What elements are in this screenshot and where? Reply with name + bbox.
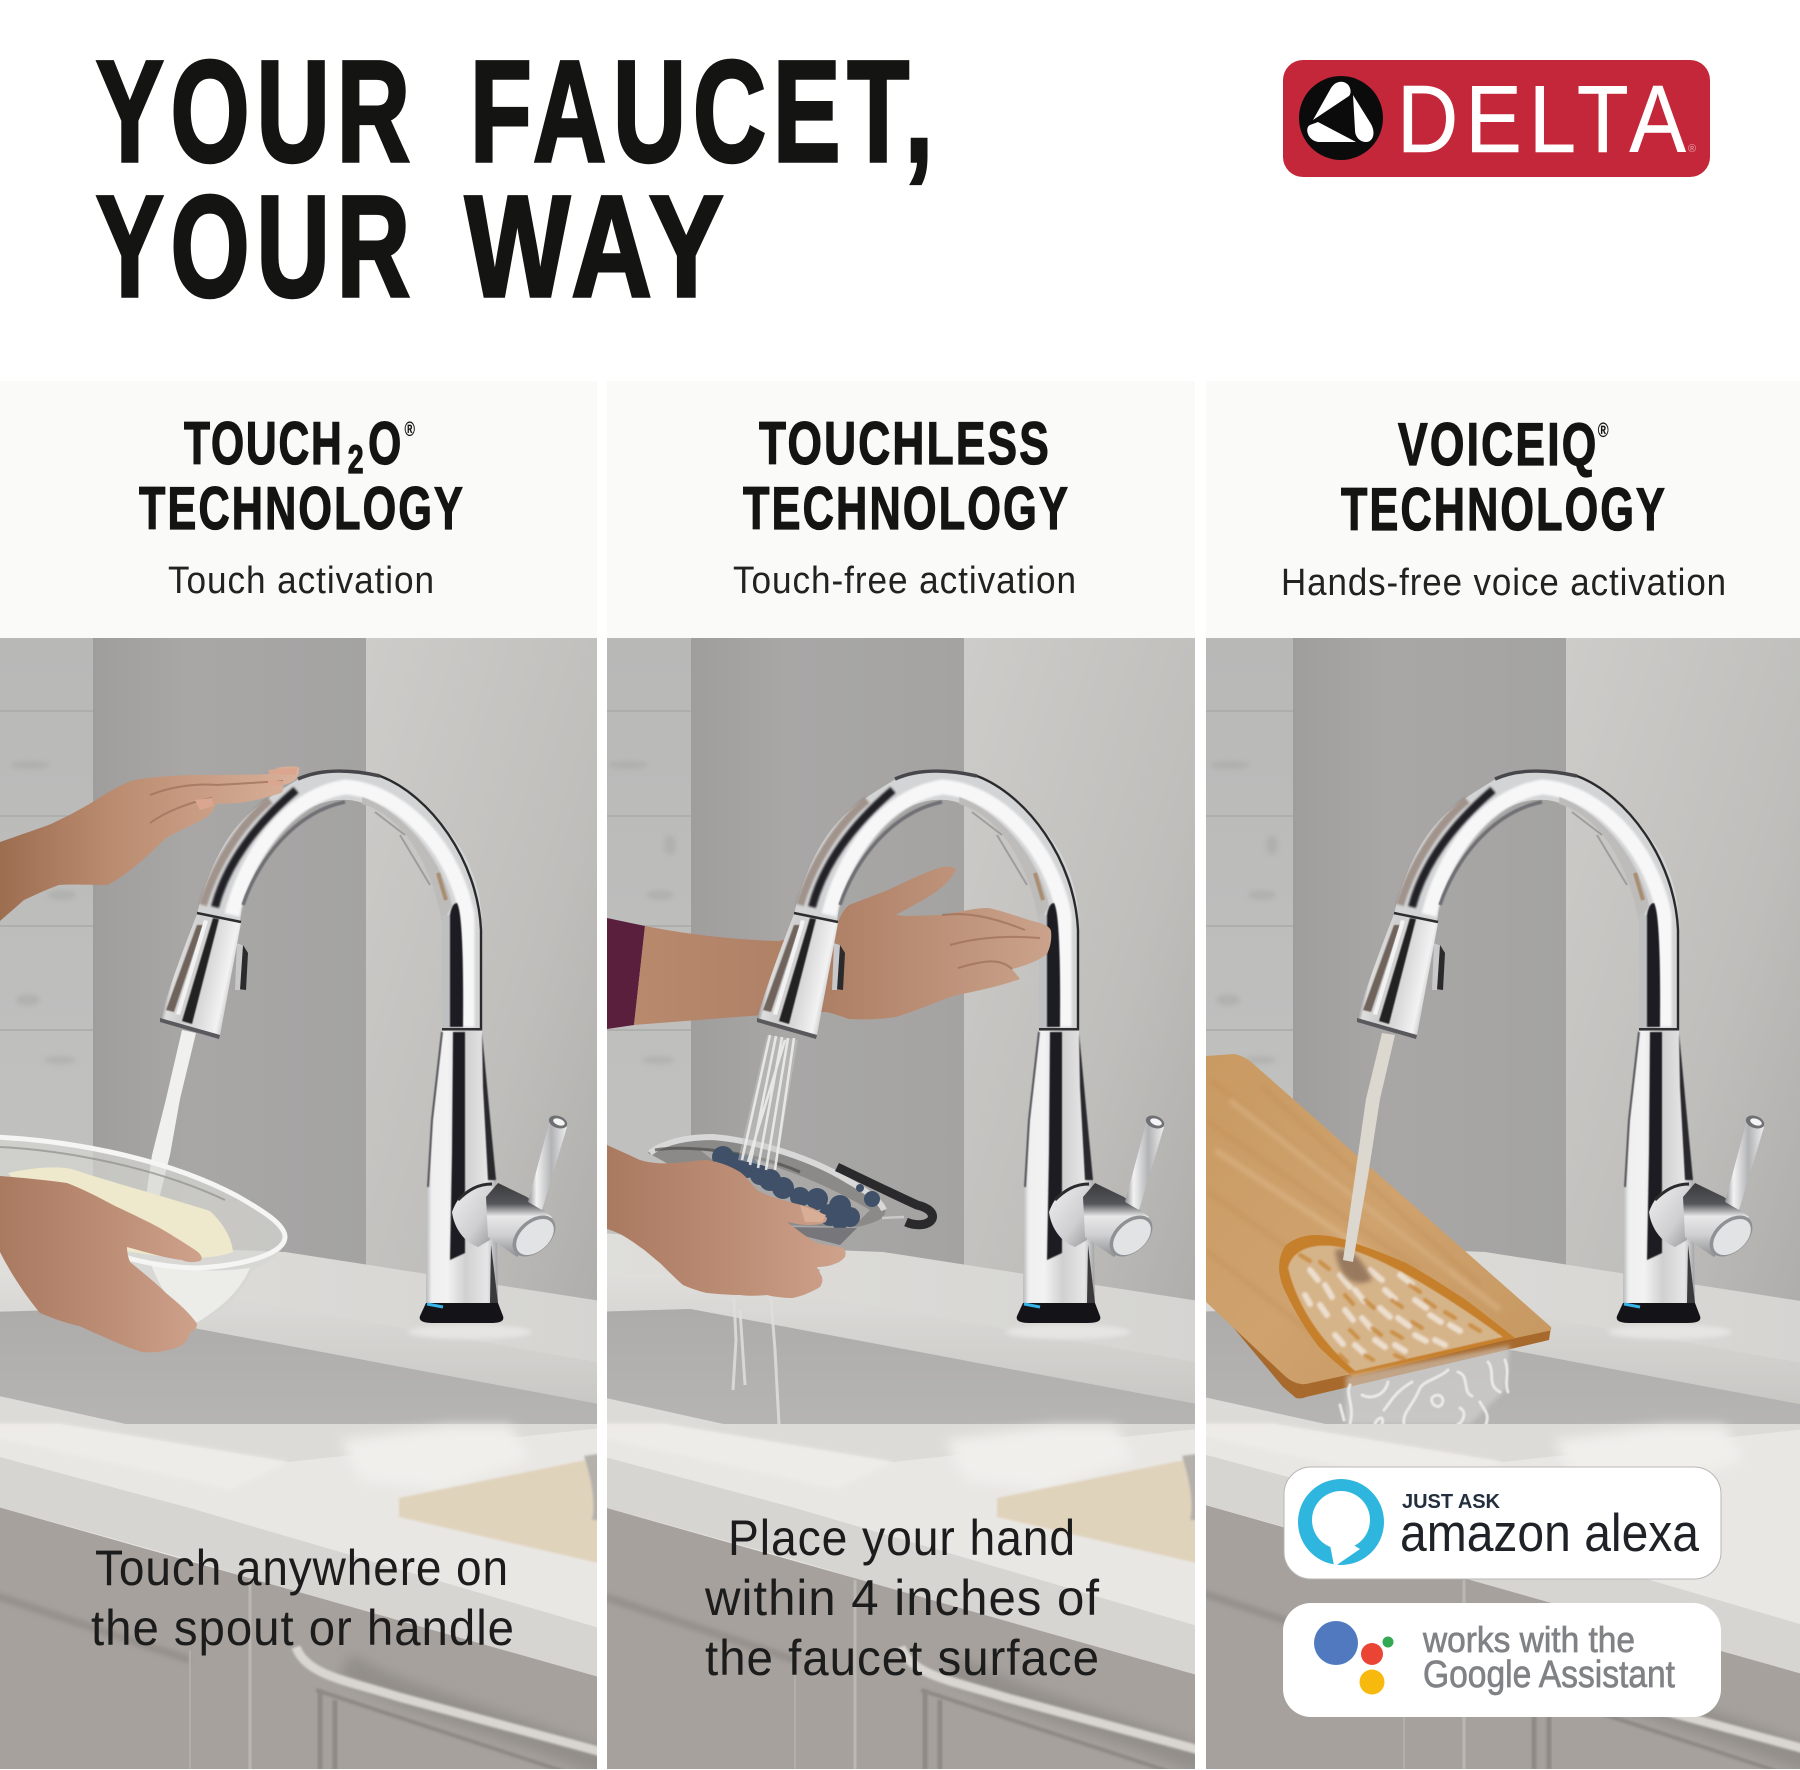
icon: Alexa ring bbox=[1298, 1479, 1384, 1566]
strainer bbox=[648, 1136, 932, 1275]
heading: Touch2O Technology: ® bbox=[405, 418, 417, 441]
lower hand holding strainer bbox=[607, 1145, 846, 1298]
cutting board bbox=[1206, 1054, 1551, 1398]
title: WAY bbox=[465, 166, 731, 327]
spray bbox=[738, 1035, 798, 1170]
panel: Touchless technology bbox=[607, 421, 1195, 1769]
heading: Touch2O Technology: O bbox=[368, 411, 403, 478]
drips bbox=[733, 1298, 779, 1424]
subheading: Touch-free activation bbox=[733, 560, 1077, 602]
splash below board bbox=[1340, 1345, 1510, 1424]
lower hand bbox=[0, 1176, 202, 1352]
title: YOUR bbox=[96, 166, 417, 327]
heading: Touchless Technology bbox=[743, 410, 1070, 542]
instruction text: Touch anywhere on bbox=[95, 1540, 509, 1596]
photo: hand touching faucet bbox=[0, 638, 620, 1430]
panel: Touch2O technology bbox=[0, 381, 620, 1770]
lower photo band bbox=[1184, 1424, 1800, 1770]
lower photo band with text bbox=[575, 1424, 1225, 1770]
header card: Touch2O bbox=[0, 381, 597, 638]
heading: VoiceIQ Technology: VOICEIQ bbox=[1398, 412, 1599, 479]
subheading: Hands-free voice activation bbox=[1281, 562, 1727, 604]
badge: Amazon Alexa bbox=[1284, 1467, 1721, 1579]
title: FAUCET, bbox=[470, 31, 940, 192]
logo: Delta bbox=[1283, 60, 1710, 177]
badge: Amazon Alexa: amazon alexa bbox=[1400, 1504, 1699, 1563]
photo: hand near faucet bbox=[588, 638, 1218, 1430]
heading: Touch2O Technology: TOUCH bbox=[184, 411, 344, 478]
logo: Delta: DELTA bbox=[1397, 66, 1693, 173]
heading: VoiceIQ Technology bbox=[1341, 412, 1667, 543]
instruction text: the faucet surface bbox=[705, 1630, 1100, 1686]
water pool bbox=[1279, 1235, 1515, 1377]
header card: VoiceIQ bbox=[1206, 381, 1800, 638]
subheading: Touch activation bbox=[168, 560, 435, 602]
water stream bbox=[1343, 1033, 1395, 1262]
photo: water on cutting board bbox=[1190, 638, 1800, 1430]
instruction text bbox=[91, 1540, 515, 1656]
sleeve bbox=[607, 918, 645, 1029]
logo: Delta: ® bbox=[1688, 143, 1696, 155]
heading: Touchless Technology: TOUCHLESS bbox=[759, 410, 1051, 477]
header card: Touchless bbox=[607, 381, 1195, 638]
heading: Touchless Technology: TECHNOLOGY bbox=[743, 475, 1070, 542]
upper hand bbox=[0, 766, 299, 921]
heading: Touch2O Technology: TECHNOLOGY bbox=[139, 475, 465, 542]
instruction text bbox=[705, 1518, 1100, 1676]
title: YOUR bbox=[96, 31, 417, 192]
heading: Touch2O Technology bbox=[139, 411, 465, 542]
arm and open hand bbox=[634, 867, 1051, 1025]
title bbox=[96, 31, 940, 327]
water stream bbox=[146, 1030, 196, 1196]
heading: VoiceIQ Technology: TECHNOLOGY bbox=[1341, 476, 1667, 543]
instruction text: the spout or handle bbox=[91, 1600, 515, 1656]
badge: Amazon Alexa: JUST ASK bbox=[1402, 1491, 1501, 1513]
glass bowl bbox=[0, 1137, 285, 1327]
icon: Google Assistant dots bbox=[1314, 1621, 1394, 1694]
instruction text: within 4 inches of bbox=[704, 1570, 1100, 1626]
instruction text: Place your hand bbox=[728, 1510, 1076, 1566]
badge: Google Assistant: Google Assistant bbox=[1423, 1654, 1675, 1696]
badge: Google Assistant bbox=[1283, 1603, 1721, 1717]
panel: VoiceIQ technology bbox=[1184, 381, 1800, 1770]
icon: Delta triangle mark bbox=[1299, 76, 1383, 160]
lower photo band with text bbox=[0, 1424, 620, 1770]
heading: VoiceIQ Technology: ® bbox=[1598, 419, 1611, 442]
badge: Google Assistant: works with the bbox=[1422, 1619, 1635, 1660]
heading: Touch2O Technology: 2 bbox=[348, 438, 365, 482]
